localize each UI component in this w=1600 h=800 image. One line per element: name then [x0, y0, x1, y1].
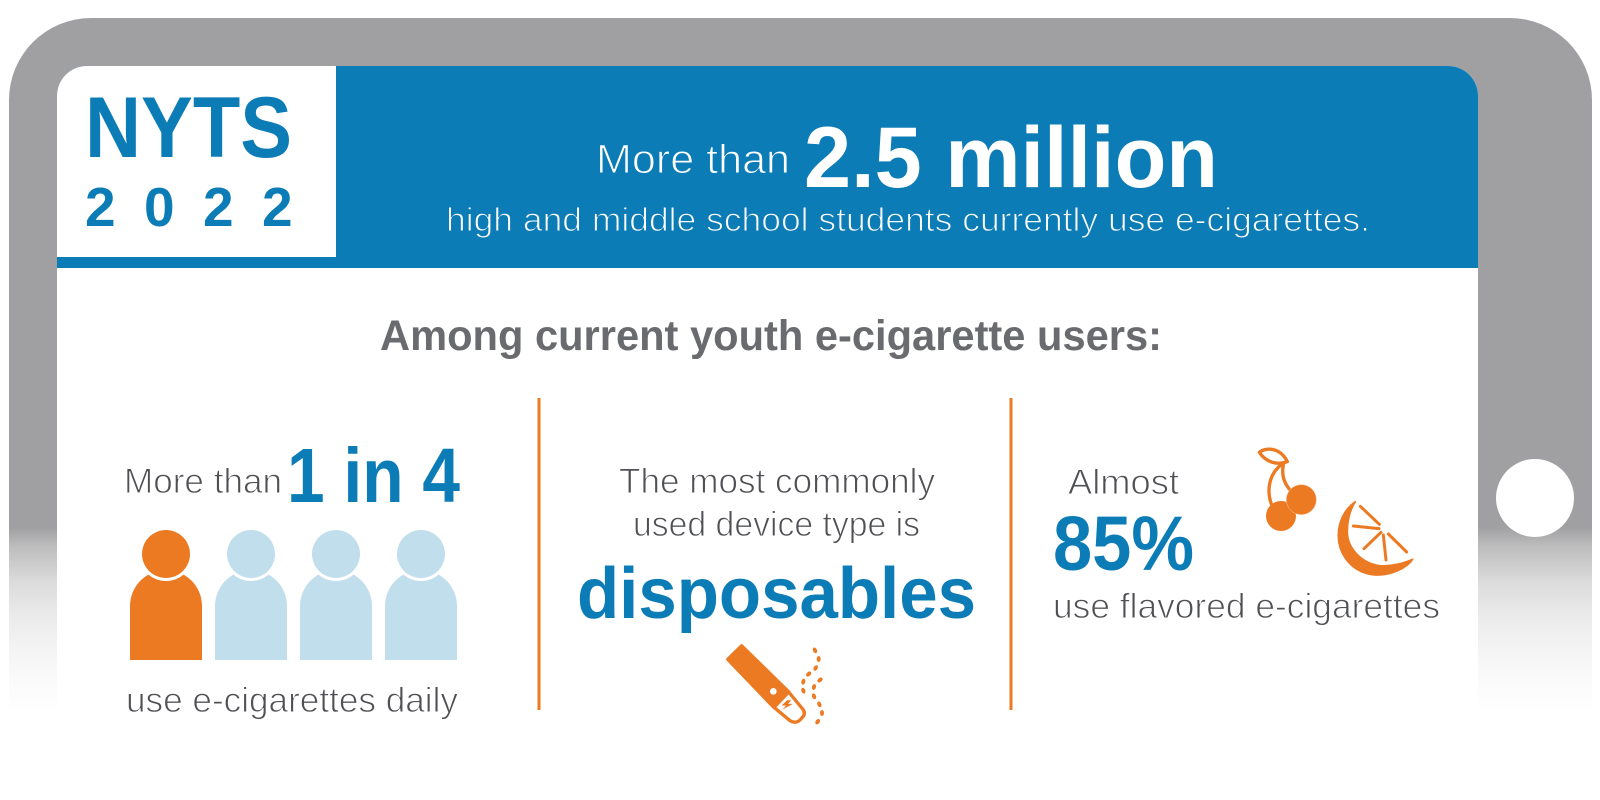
- flavored lead text: Almost: [1068, 463, 1179, 502]
- icon: orange slice: [1338, 502, 1413, 575]
- panel: daily use: [124, 433, 460, 720]
- logo: year: 2022: [85, 176, 293, 238]
- header banner: [57, 66, 1478, 268]
- device text line 1: The most commonly: [619, 462, 935, 501]
- device text line 2: used device type is: [633, 505, 920, 544]
- panel: flavored: [1053, 449, 1440, 626]
- section heading: Among current youth e-cigarette users:: [380, 312, 1162, 360]
- people pictogram: [130, 527, 457, 660]
- person: non-daily user: [385, 527, 457, 660]
- person: non-daily user: [215, 527, 287, 660]
- flavored caption: use flavored e-cigarettes: [1053, 587, 1440, 626]
- person: daily user: [130, 527, 202, 660]
- person: non-daily user: [300, 527, 372, 660]
- daily figure: 1 in 4: [287, 433, 460, 519]
- headline subtext: high and middle school students currently use e-cigarettes.: [446, 201, 1370, 238]
- logo box: [57, 66, 336, 257]
- daily caption: use e-cigarettes daily: [126, 681, 458, 720]
- flavored figure: 85%: [1053, 501, 1194, 587]
- headline lead: More than: [596, 136, 790, 182]
- panel: device type: [577, 449, 1440, 725]
- headline figure: 2.5 million: [804, 110, 1218, 206]
- daily lead text: More than: [124, 462, 282, 501]
- icon: cherries: [1259, 449, 1316, 531]
- phone home button: [1496, 459, 1574, 537]
- device figure: disposables: [577, 554, 976, 634]
- logo: NYTS: NYTS: [85, 80, 292, 176]
- icon: disposable vape: [728, 646, 824, 725]
